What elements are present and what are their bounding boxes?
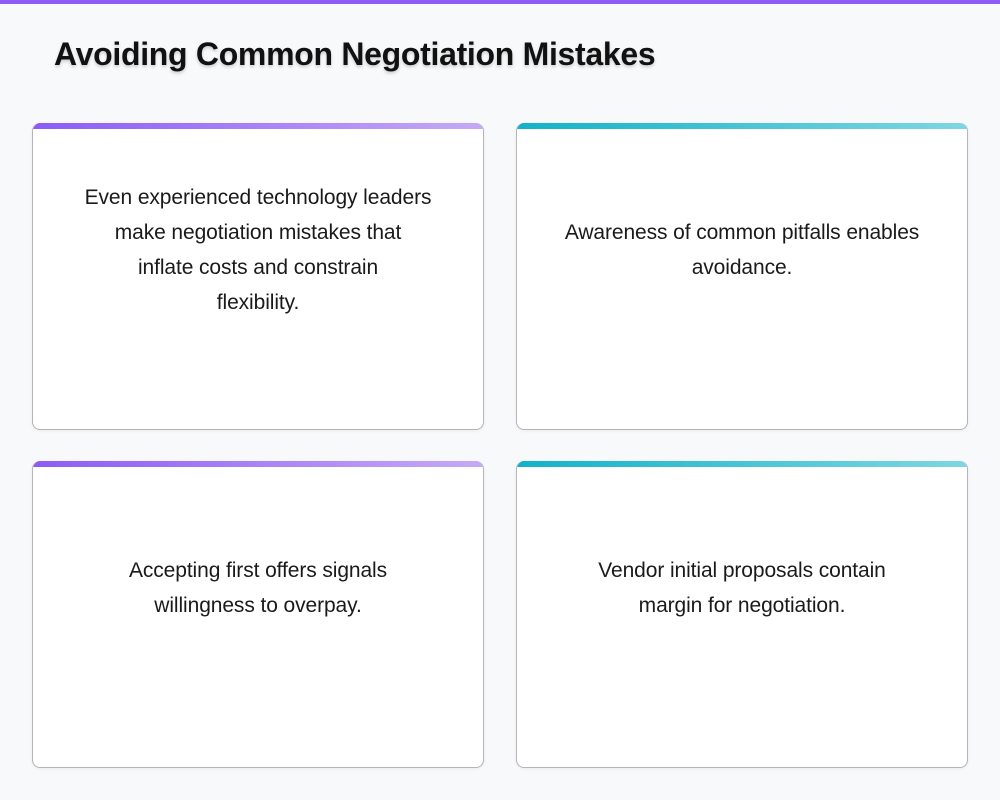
text block: Awareness of common pitfalls enables <box>565 221 919 244</box>
text block <box>85 186 431 314</box>
text block: willingness to overpay. <box>154 594 362 617</box>
text block: Even experienced technology leaders <box>85 186 431 209</box>
text block: margin for negotiation. <box>639 594 845 617</box>
text block: Vendor initial proposals contain <box>598 559 886 582</box>
panel: awareness <box>516 123 968 430</box>
panel: vendor proposals <box>516 461 968 768</box>
title: Avoiding Common Negotiation Mistakes <box>54 36 655 72</box>
text block <box>598 559 886 617</box>
text block: Accepting first offers signals <box>129 559 387 582</box>
text block: flexibility. <box>217 291 299 314</box>
panel: first offers <box>32 461 484 768</box>
text block: avoidance. <box>692 256 792 279</box>
text block <box>565 221 919 279</box>
text block: make negotiation mistakes that <box>115 221 401 244</box>
panel: experienced leaders <box>32 123 484 430</box>
text block: inflate costs and constrain <box>138 256 378 279</box>
text block <box>129 559 387 617</box>
